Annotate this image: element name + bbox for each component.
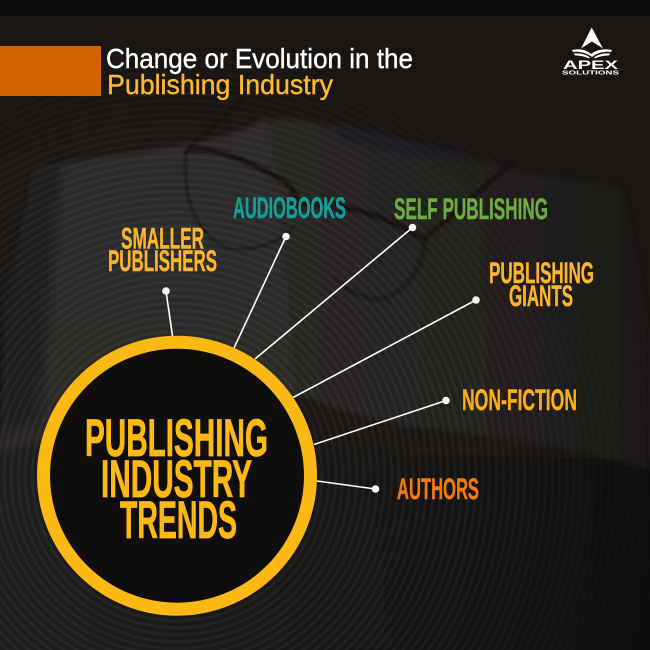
title: Change or Evolution in the (106, 43, 413, 74)
connector: self publishing (255, 224, 416, 359)
background concentric rings (0, 114, 539, 650)
logo: Apex Solutions: APEX (563, 60, 619, 72)
label: smaller publishers: SMALLER (121, 222, 204, 256)
central circle heading: INDUSTRY (101, 450, 252, 509)
central circle heading (85, 409, 268, 550)
connector: smaller publishers (162, 287, 172, 336)
label: smaller publishers (108, 222, 217, 278)
connector: non-fiction (314, 397, 450, 444)
central circle (44, 342, 310, 609)
logo: Apex Solutions: SOLUTIONS (562, 70, 620, 76)
label: smaller publishers: PUBLISHERS (108, 245, 217, 278)
connector: authors (317, 481, 379, 493)
label: audiobooks: AUDIOBOOKS (233, 192, 346, 225)
title (106, 43, 413, 100)
label: publishing giants: GIANTS (509, 280, 573, 313)
title: Publishing Industry (107, 69, 333, 100)
label: authors: AUTHORS (397, 473, 479, 506)
logo: Apex Solutions (562, 28, 620, 76)
label: publishing giants (489, 257, 594, 313)
central circle heading: PUBLISHING (85, 409, 268, 468)
top dark band (0, 0, 650, 16)
orange title block (0, 46, 101, 96)
connector: publishing giants (293, 296, 480, 398)
connector: audiobooks (234, 233, 290, 348)
central circle heading: TRENDS (120, 491, 237, 550)
